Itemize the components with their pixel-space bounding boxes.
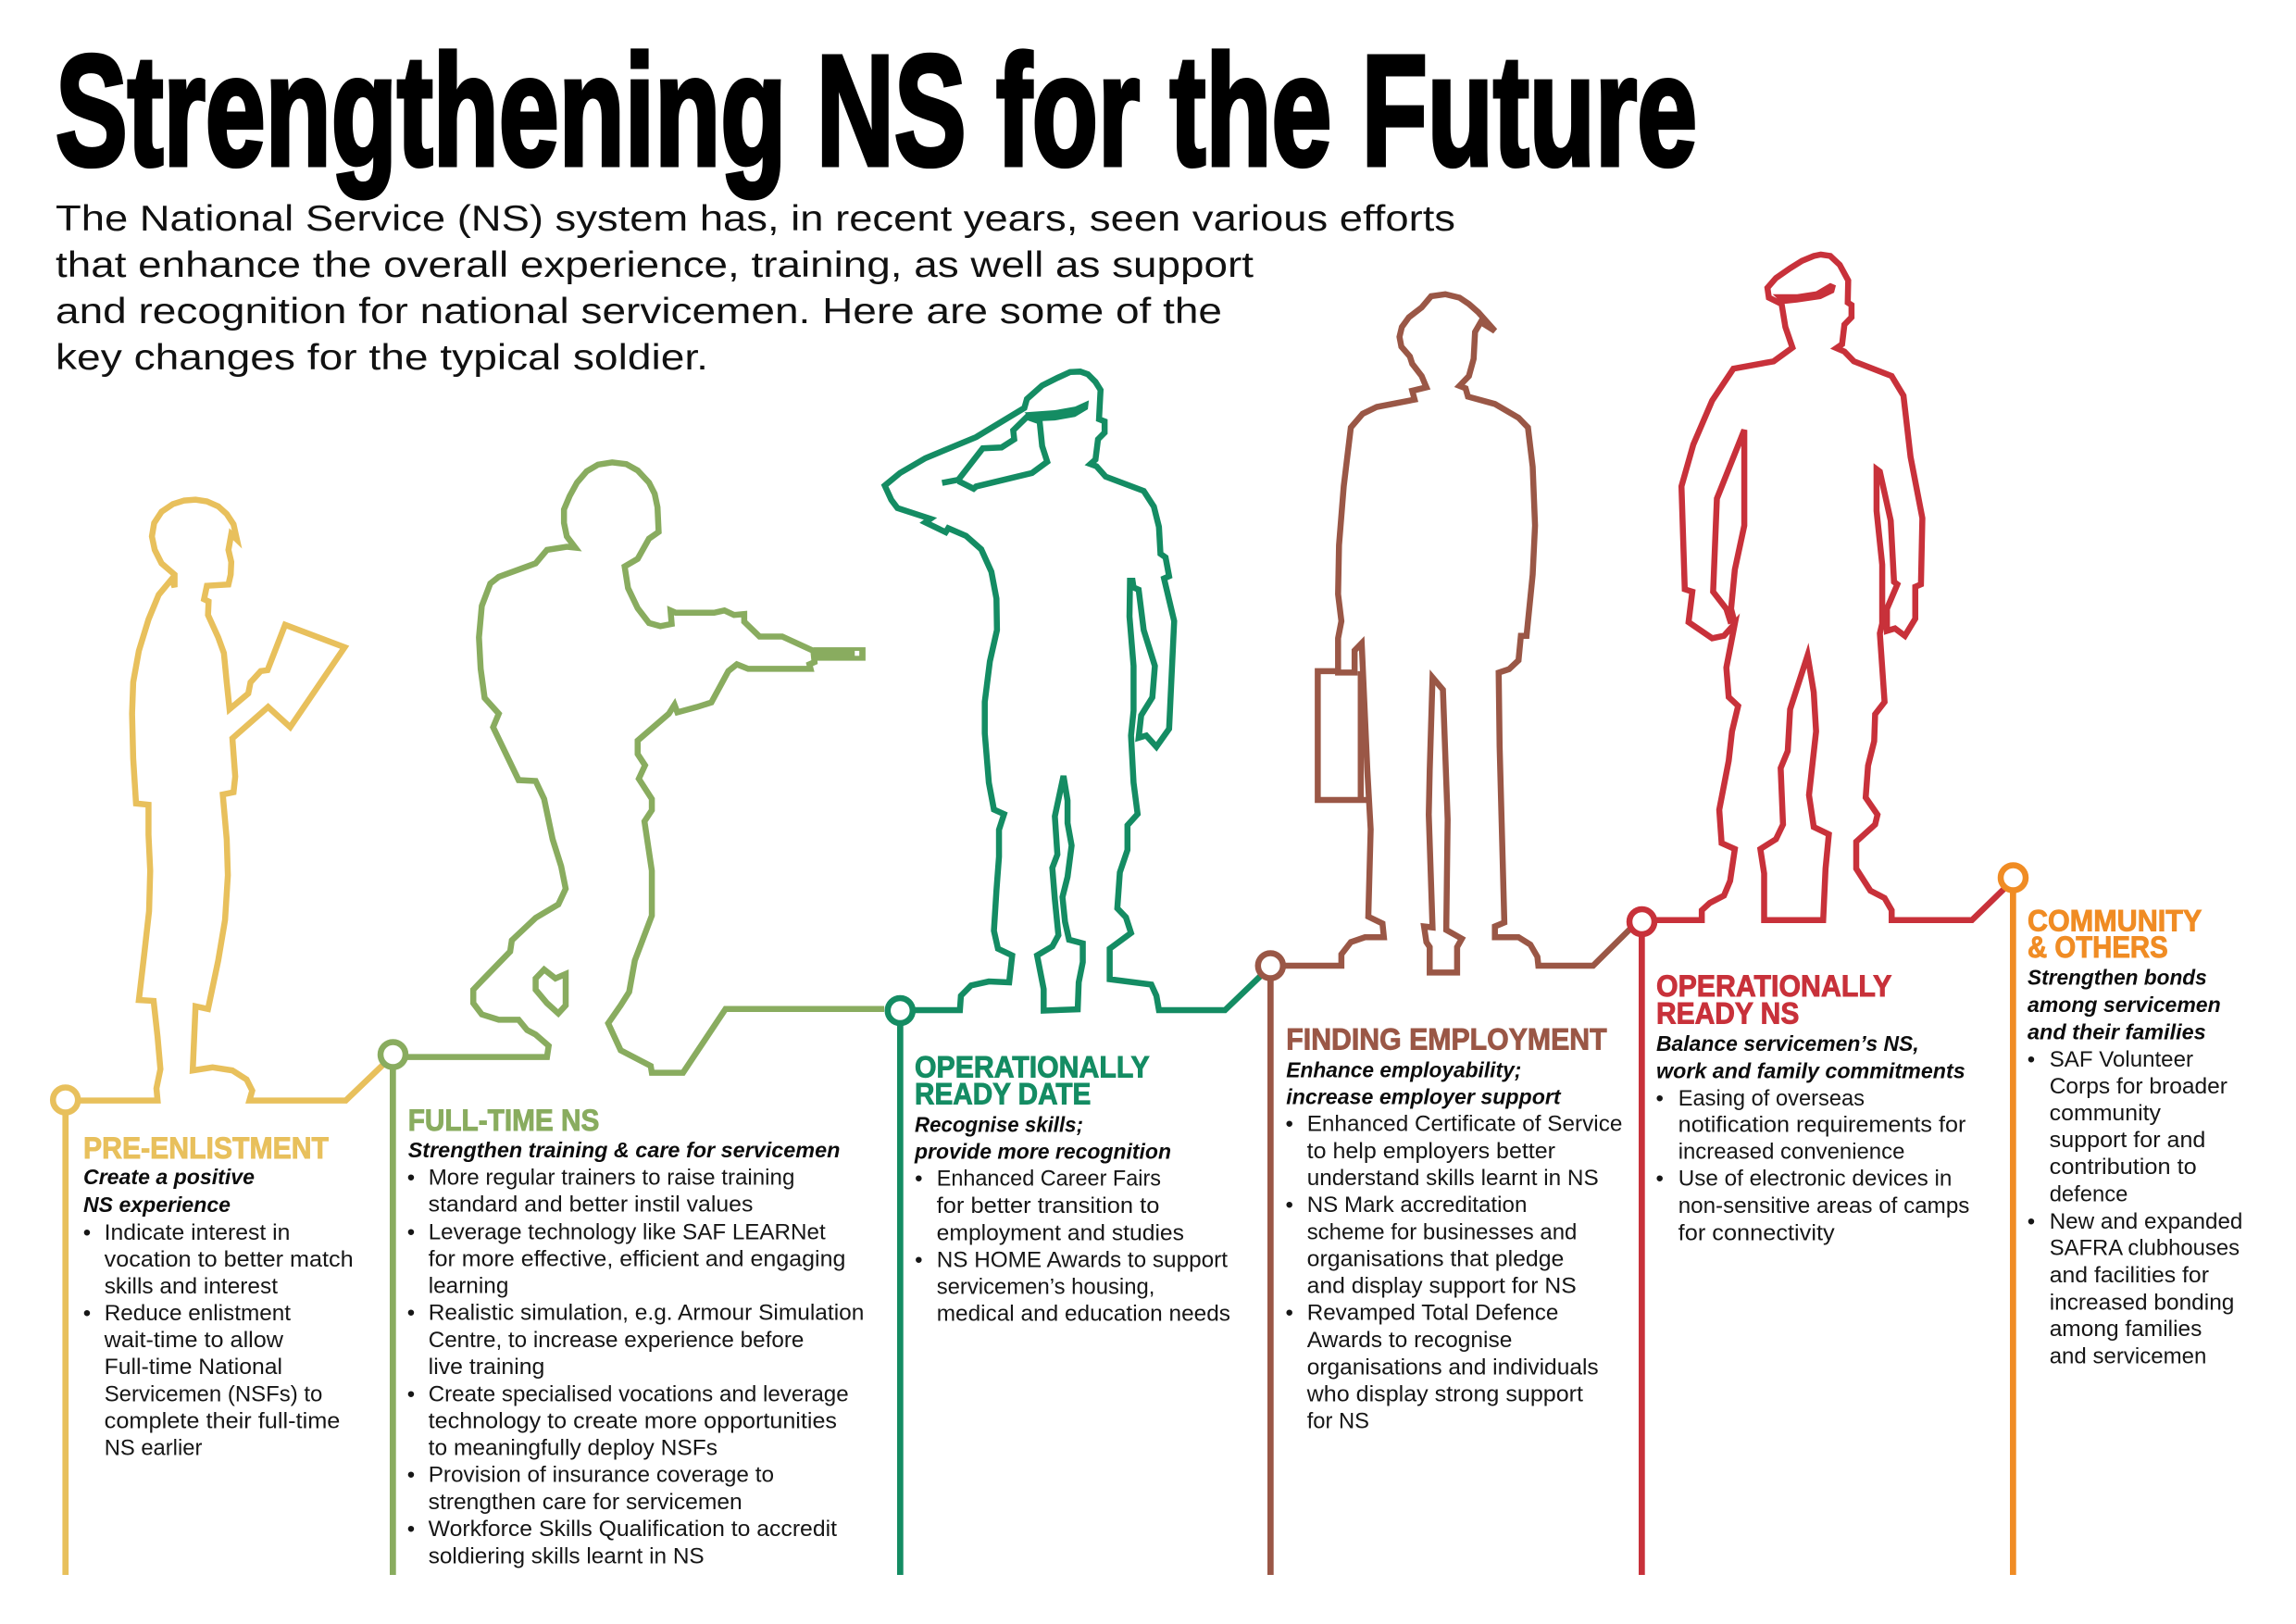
bullet list: finding employment (1285, 1112, 1622, 1433)
bullet list: full-time NS: • (407, 1219, 415, 1244)
bullet list: full-time NS: learning (429, 1274, 508, 1299)
subheading: operationally ready date: Recognise skills; (915, 1113, 1083, 1137)
bullet list: community and others: among families (2050, 1317, 2202, 1342)
bullet list: operationally ready date: NS HOME Awards to support (937, 1247, 1228, 1272)
bullet list: finding employment: organisations that pledge (1307, 1246, 1564, 1271)
heading: pre-enlistment: PRE-ENLISTMENT (83, 1131, 329, 1165)
bullet list: community and others: • (2028, 1047, 2035, 1072)
bullet list: finding employment: • (1285, 1112, 1293, 1137)
timeline stem: full-time NS (390, 1055, 396, 1575)
intro text: and recognition for national servicemen. Here are some of the (56, 292, 1222, 331)
silhouette: student reading a document (80, 500, 391, 1101)
marker: community and others (2001, 865, 2026, 891)
bullet list: community and others: and servicemen (2050, 1344, 2206, 1368)
intro text: The National Service (NS) system has, in recent years, seen various efforts (56, 199, 1455, 239)
bullet list: finding employment: who display strong support (1306, 1381, 1583, 1406)
bullet list: operationally ready NS (1655, 1086, 1969, 1245)
heading: operationally ready date: OPERATIONALLY (915, 1050, 1150, 1083)
subheading: community and others (2028, 966, 2221, 1044)
bullet list: community and others: defence (2050, 1181, 2128, 1207)
bullet list: pre-enlistment: vocation to better match (105, 1247, 354, 1272)
bullet list: full-time NS: Leverage technology like SAF LEARNet (429, 1219, 826, 1244)
heading: operationally ready date: READY DATE (915, 1078, 1091, 1111)
bullet list: pre-enlistment: complete their full-time (105, 1409, 340, 1434)
bullet list: finding employment: organisations and individuals (1307, 1355, 1599, 1380)
bullet list: pre-enlistment: Reduce enlistment (105, 1301, 291, 1326)
bullet list: full-time NS: standard and better instil values (429, 1192, 753, 1217)
panel: finding employment (1258, 294, 1637, 1575)
bullet list: operationally ready NS: notification requirements for (1678, 1113, 1965, 1138)
bullet list: community and others: support for and (2050, 1128, 2205, 1153)
bullet list: community and others: community (2050, 1101, 2162, 1126)
panel: community and others (2001, 865, 2242, 1575)
timeline stem: pre-enlistment (62, 1100, 69, 1575)
bullet list: pre-enlistment: NS earlier (105, 1436, 202, 1461)
bullet list: operationally ready NS: • (1655, 1167, 1664, 1192)
bullet list: community and others: increased bonding (2050, 1290, 2234, 1315)
bullet list: pre-enlistment: • (83, 1301, 91, 1326)
heading: community and others: & OTHERS (2028, 931, 2168, 964)
bullet list: operationally ready date: employment and studies (937, 1220, 1184, 1245)
bullet list: full-time NS: live training (429, 1355, 544, 1380)
subheading: finding employment: increase employer support (1286, 1084, 1562, 1108)
subheading: pre-enlistment: Create a positive (83, 1165, 255, 1189)
bullet list: finding employment: NS Mark accreditation (1307, 1193, 1527, 1218)
bullet list: operationally ready NS: for connectivity (1678, 1220, 1835, 1245)
bullet list: operationally ready date: medical and education needs (937, 1302, 1230, 1327)
subheading: operationally ready NS: work and family commitments (1656, 1058, 1965, 1082)
marker: pre-enlistment (53, 1087, 78, 1113)
bullet list: community and others: Corps for broader (2050, 1074, 2227, 1099)
subheading: operationally ready NS: Balance servicemen’s NS, (1656, 1031, 1919, 1056)
bullet list: operationally ready date: • (915, 1247, 923, 1272)
bullet list: full-time NS: Centre, to increase experience before (429, 1328, 804, 1353)
bullet list: community and others: • (2028, 1209, 2035, 1234)
bullet list: operationally ready date: for better transition to (937, 1193, 1159, 1218)
bullet list: full-time NS: technology to create more opportunities (429, 1408, 837, 1433)
intro text: key changes for the typical soldier. (56, 338, 708, 378)
bullet list: operationally ready NS: • (1655, 1086, 1664, 1111)
bullet list: community and others (2028, 1047, 2242, 1368)
bullet list: pre-enlistment: wait-time to allow (104, 1328, 283, 1353)
bullet list: full-time NS: More regular trainers to raise training (429, 1165, 794, 1190)
intro text (56, 199, 1455, 378)
subheading: finding employment: Enhance employability; (1286, 1057, 1521, 1081)
bullet list: community and others: contribution to (2050, 1155, 2197, 1180)
subheading: operationally ready date: provide more recognition (914, 1140, 1171, 1164)
bullet list: finding employment: scheme for businesses and (1307, 1219, 1577, 1244)
bullet list: operationally ready date: servicemen’s housing, (937, 1274, 1154, 1299)
timeline stem: operationally ready NS (1639, 921, 1645, 1575)
subheading: pre-enlistment: NS experience (83, 1193, 231, 1217)
bullet list: pre-enlistment: Indicate interest in (105, 1220, 290, 1245)
bullet list: community and others: New and expanded (2050, 1209, 2242, 1234)
bullet list: full-time NS: • (407, 1517, 415, 1542)
marker: full-time NS (381, 1043, 406, 1067)
subheading: operationally ready date (914, 1113, 1171, 1164)
bullet list: operationally ready NS: non-sensitive areas of camps (1678, 1193, 1969, 1218)
bullet list: pre-enlistment (83, 1220, 354, 1461)
panel: operationally ready date (885, 371, 1266, 1575)
bullet list: full-time NS: Create specialised vocations and leverage (429, 1381, 849, 1406)
marker: finding employment (1258, 954, 1283, 978)
bullet list: full-time NS: Workforce Skills Qualification to accredit (429, 1517, 837, 1542)
bullet list: finding employment: for NS (1307, 1408, 1369, 1433)
subheading: finding employment (1286, 1057, 1562, 1108)
bullet list: finding employment: • (1285, 1193, 1293, 1218)
marker: operationally ready date (888, 998, 913, 1023)
bullet list: operationally ready date (915, 1167, 1230, 1327)
heading: operationally ready NS (1656, 969, 1891, 1030)
bullet list: full-time NS: soldiering skills learnt in NS (429, 1543, 705, 1568)
bullet list: pre-enlistment: skills and interest (105, 1274, 278, 1299)
bullet list: full-time NS: • (407, 1165, 415, 1190)
subheading: operationally ready NS (1656, 1031, 1965, 1082)
silhouette: man with briefcase (1273, 294, 1637, 972)
silhouette: soldier in beret (1651, 255, 2010, 920)
bullet list: community and others: SAFRA clubhouses (2050, 1236, 2240, 1261)
panel: operationally ready NS (1629, 255, 2010, 1575)
bullet list: full-time NS: for more effective, efficient and engaging (429, 1246, 845, 1271)
bullet list: operationally ready date: Enhanced Career Fairs (937, 1167, 1161, 1192)
bullet list: full-time NS: strengthen care for servicemen (429, 1490, 742, 1515)
bullet list: operationally ready NS: increased convenience (1678, 1140, 1904, 1165)
silhouette: kneeling soldier aiming rifle (406, 462, 884, 1073)
bullet list: full-time NS: Realistic simulation, e.g. Armour Simulation (429, 1301, 864, 1326)
bullet list: full-time NS (407, 1165, 864, 1568)
bullet list: finding employment: and display support for NS (1307, 1274, 1577, 1299)
bullet list: finding employment: Enhanced Certificate of Service (1307, 1112, 1622, 1137)
panel: pre-enlistment (53, 500, 391, 1575)
bullet list: community and others: and facilities for (2050, 1263, 2209, 1288)
bullet list: full-time NS: to meaningfully deploy NSFs (429, 1436, 718, 1461)
bullet list: full-time NS: Provision of insurance coverage to (429, 1463, 774, 1488)
bullet list: finding employment: Revamped Total Defence (1307, 1301, 1558, 1326)
bullet list: operationally ready NS: Use of electronic devices in (1678, 1167, 1952, 1192)
bullet list: finding employment: Awards to recognise (1307, 1328, 1512, 1353)
heading: operationally ready date (915, 1050, 1150, 1111)
timeline stem: operationally ready date (897, 1011, 904, 1575)
bullet list: pre-enlistment: Full-time National (105, 1355, 282, 1380)
timeline stem: finding employment (1267, 966, 1274, 1575)
bullet list: finding employment: • (1285, 1301, 1293, 1326)
bullet list: full-time NS: • (407, 1381, 415, 1406)
bullet list: pre-enlistment: Servicemen (NSFs) to (105, 1382, 322, 1407)
bullet list: operationally ready NS: Easing of overseas (1678, 1086, 1865, 1111)
subheading: community and others: Strengthen bonds (2028, 966, 2207, 990)
subheading: community and others: and their families (2028, 1020, 2206, 1044)
bullet list: finding employment: understand skills learnt in NS (1307, 1166, 1599, 1191)
timeline stem: community and others (2010, 878, 2016, 1575)
bullet list: full-time NS: • (407, 1463, 415, 1488)
silhouette: saluting soldier (885, 371, 1266, 1011)
bullet list: community and others: SAF Volunteer (2050, 1047, 2193, 1072)
marker: operationally ready NS (1629, 909, 1654, 934)
heading: operationally ready NS: READY NS (1656, 996, 1799, 1030)
heading: finding employment: FINDING EMPLOYMENT (1286, 1022, 1607, 1056)
subheading: pre-enlistment (83, 1165, 255, 1217)
subheading: full-time NS: Strengthen training & care for servicemen (408, 1138, 840, 1162)
heading: full-time NS: FULL-TIME NS (408, 1104, 599, 1137)
bullet list: finding employment: to help employers better (1307, 1139, 1555, 1164)
panel: full-time NS (381, 462, 884, 1575)
heading: operationally ready NS: OPERATIONALLY (1656, 969, 1891, 1003)
heading: community and others: COMMUNITY (2028, 904, 2202, 937)
bullet list: operationally ready date: • (915, 1167, 923, 1192)
intro text: that enhance the overall experience, training, as well as support (56, 245, 1254, 285)
subheading: community and others: among servicemen (2028, 993, 2221, 1017)
bullet list: full-time NS: • (407, 1301, 415, 1326)
heading: community and others (2028, 904, 2202, 964)
bullet list: pre-enlistment: • (83, 1220, 91, 1245)
